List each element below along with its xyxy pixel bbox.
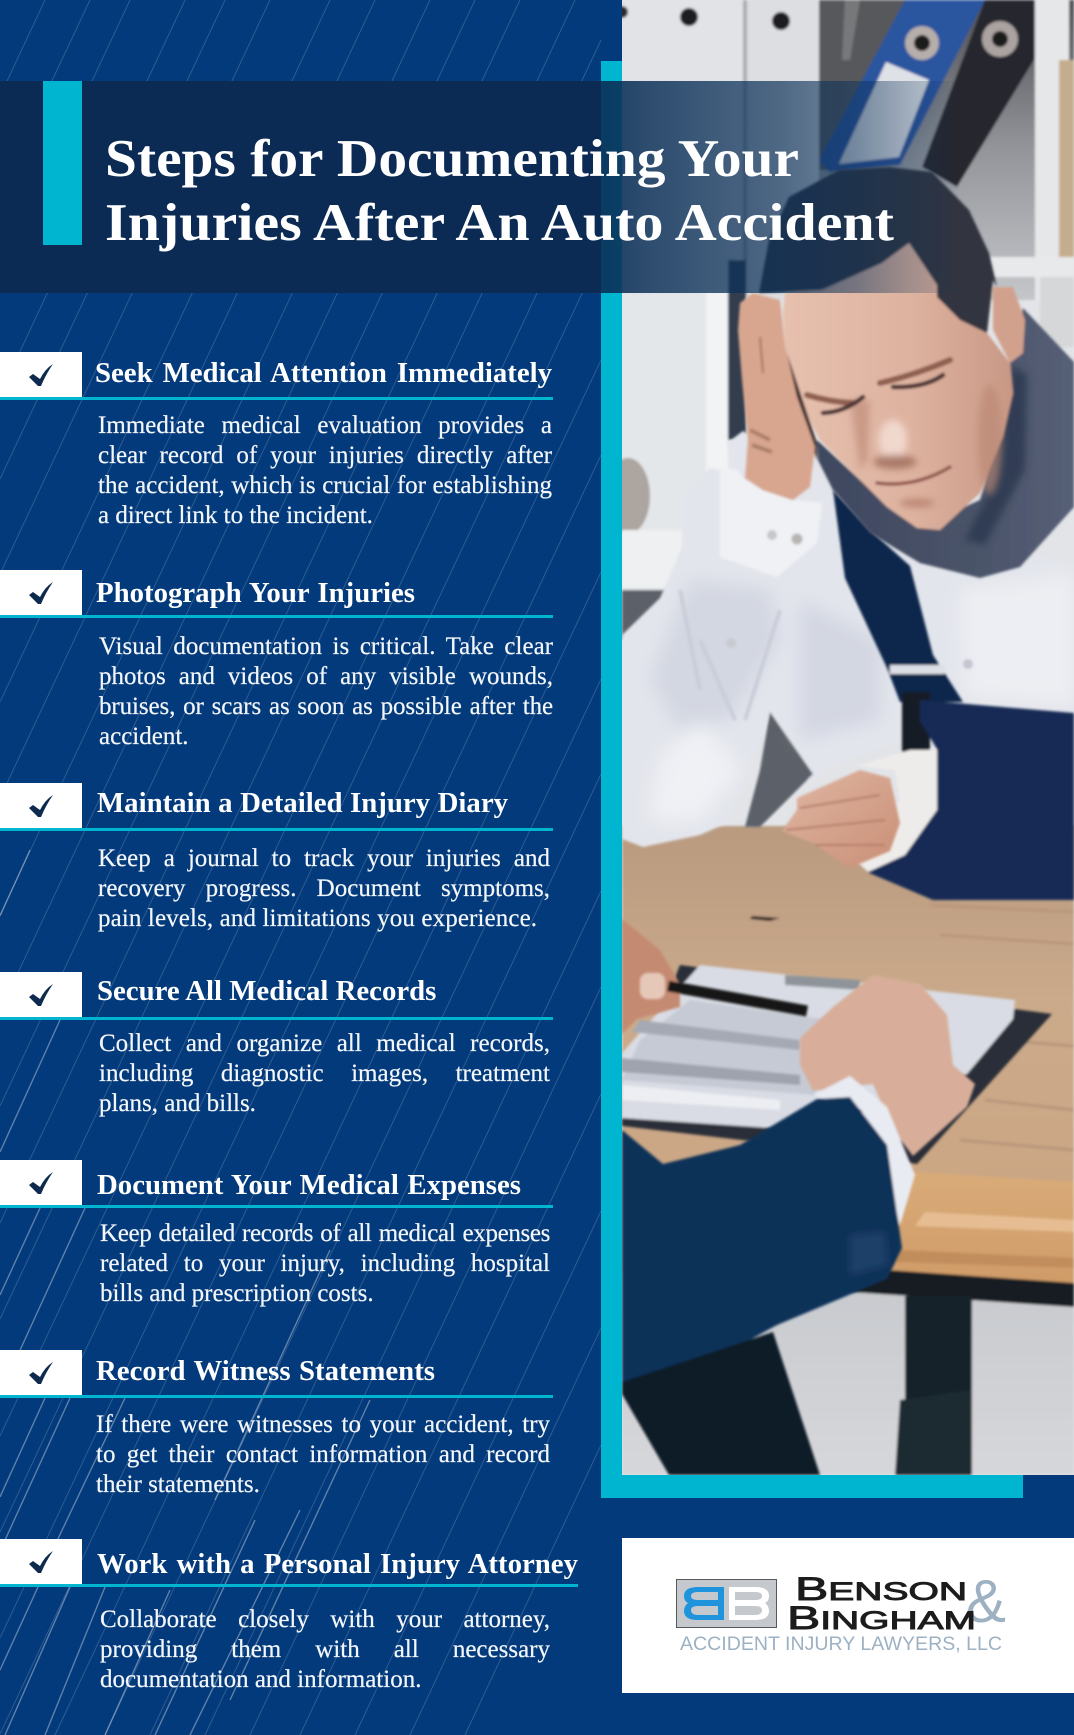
body text: providing them with all necessary: [100, 1636, 550, 1662]
teal accent bar: [43, 81, 82, 245]
heading: Secure All Medical Records: [97, 975, 436, 1007]
body text: Keep detailed records of all medical expenses: [100, 1220, 550, 1246]
title: Injuries After An Auto Accident: [105, 194, 894, 252]
heading: Document Your Medical Expenses: [97, 1169, 521, 1201]
step 2: photograph injuries: [0, 570, 553, 750]
body text: [98, 632, 553, 750]
body text: the accident, which is crucial for establishing: [98, 472, 552, 498]
heading: Work with a Personal Injury Attorney: [97, 1548, 578, 1580]
body text: [99, 1030, 550, 1117]
logo wordmark: B ENSON: [795, 1571, 967, 1607]
body text: bruises, or scars as soon as possible after the: [99, 692, 553, 720]
photo: head, neck collar and face: [738, 167, 1074, 578]
step 5: medical expenses: [0, 1160, 553, 1307]
body text: recovery progress. Document symptoms,: [98, 874, 550, 902]
body text: Collaborate closely with your attorney,: [100, 1606, 550, 1632]
heading: Seek Medical Attention Immediately: [95, 357, 552, 389]
photo: clipboard and documents: [622, 965, 1052, 1164]
body text: Collect and organize all medical records,: [99, 1030, 550, 1056]
body text: [100, 1606, 550, 1692]
body text: their statements.: [96, 1470, 260, 1498]
step 1: seek medical attention: [0, 352, 553, 528]
icon: check mark: [0, 1350, 82, 1395]
panel: injured man photograph: [606, 0, 1074, 1475]
step 7: personal injury attorney: [0, 1539, 578, 1692]
logo wordmark: [787, 1571, 976, 1636]
photo: arm sling: [833, 490, 1074, 900]
body text: plans, and bills.: [99, 1090, 256, 1116]
photo background: shelves and binders: [606, 0, 1074, 644]
body text: Immediate medical evaluation provides a: [98, 412, 552, 438]
heading: Maintain a Detailed Injury Diary: [97, 787, 508, 819]
icon: BB logo mark: [676, 1580, 776, 1628]
step 6: witness statements: [0, 1350, 553, 1498]
body text: [98, 412, 552, 528]
body text: Visual documentation is critical. Take clear: [99, 632, 553, 660]
body text: accident.: [99, 722, 189, 750]
body text: [96, 1410, 550, 1498]
body text: clear record of your injuries directly after: [98, 442, 552, 468]
body text: photos and videos of any visible wounds,: [99, 662, 553, 690]
body text: [98, 844, 550, 932]
body text: to get their contact information and record: [96, 1440, 550, 1468]
body text: bills and prescription costs.: [100, 1280, 374, 1306]
body text: including diagnostic images, treatment: [99, 1060, 550, 1086]
icon: check mark: [0, 1539, 82, 1584]
title banner: [0, 81, 601, 293]
icon: check mark: [0, 570, 82, 615]
photo: injured hand on desk: [782, 770, 900, 868]
diagonal stripe pattern: [0, 0, 601, 1735]
photo: attorney hands, pen and suit sleeve: [622, 919, 975, 1475]
title: [105, 130, 894, 252]
icon: check mark: [0, 783, 82, 828]
step 4: medical records: [0, 972, 553, 1117]
icon: check mark: [0, 352, 82, 397]
body text: pain levels, and limitations you experience.: [98, 904, 537, 932]
heading: Photograph Your Injuries: [96, 577, 415, 609]
photo: desk and floor: [622, 826, 1074, 1475]
teal frame behind the photo: [601, 61, 1023, 1498]
photo: shirt and arm: [622, 431, 1074, 847]
step 3: injury diary: [0, 783, 553, 932]
body text: documentation and information.: [100, 1666, 421, 1692]
icon: check mark: [0, 972, 82, 1017]
logo wordmark: B INGHAM: [787, 1600, 976, 1636]
body text: Keep a journal to track your injuries and: [98, 844, 550, 872]
icon: check mark: [0, 1160, 82, 1205]
body text: If there were witnesses to your accident, try: [96, 1410, 550, 1438]
logo tagline: ACCIDENT INJURY LAWYERS, LLC: [680, 1634, 1002, 1655]
body text: a direct link to the incident.: [98, 502, 373, 528]
body text: related to your injury, including hospital: [100, 1250, 550, 1276]
panel: logo: [622, 1538, 1074, 1693]
heading: Record Witness Statements: [96, 1355, 435, 1387]
icon: ampersand: &: [966, 1568, 1006, 1635]
title: Steps for Documenting Your: [105, 130, 799, 188]
body text: [100, 1220, 550, 1307]
